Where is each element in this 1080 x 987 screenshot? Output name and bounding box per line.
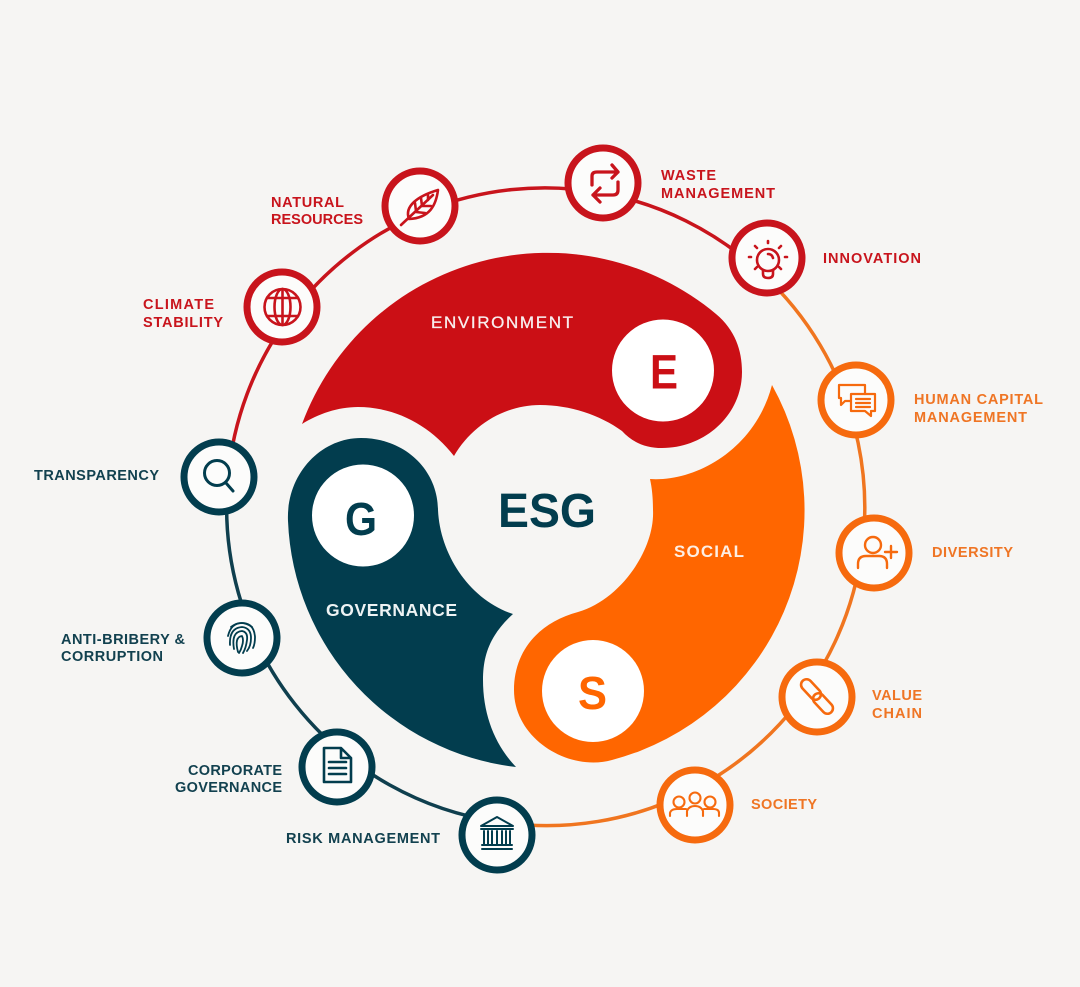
badge: G	[312, 464, 414, 566]
badge: G: G	[345, 493, 377, 545]
label: society: SOCIETY	[751, 797, 817, 813]
label: value chain: CHAIN	[872, 706, 922, 722]
node: society	[660, 770, 730, 840]
title: ESG: ESG	[498, 485, 596, 538]
label: waste management	[661, 168, 775, 202]
label: anti-bribery and corruption: ANTI-BRIBERY &	[61, 632, 186, 648]
node: value chain	[782, 662, 852, 732]
ring: environment arc	[228, 188, 757, 478]
panel: social segment	[514, 385, 805, 763]
label: climate stability: CLIMATE	[143, 297, 214, 313]
node: diversity	[839, 518, 909, 588]
environment heading: ENVIRONMENT	[431, 313, 573, 332]
label: natural resources: RESOURCES	[271, 212, 363, 228]
node: natural resources	[385, 171, 455, 241]
badge: S: S	[578, 667, 607, 719]
node: corporate governance	[302, 732, 372, 802]
label: corporate governance: GOVERNANCE	[175, 780, 282, 796]
label: diversity: DIVERSITY	[932, 545, 1013, 561]
governance heading: GOVERNANCE	[326, 600, 457, 620]
badge: E: E	[650, 346, 678, 400]
panel: environment segment	[302, 253, 742, 456]
node: risk management	[462, 800, 532, 870]
label: natural resources: NATURAL	[271, 195, 344, 211]
label: human capital management: MANAGEMENT	[914, 410, 1027, 426]
label: value chain: VALUE	[872, 688, 922, 704]
node: human capital management	[821, 365, 891, 435]
node: transparency	[184, 442, 254, 512]
label: value chain	[872, 688, 922, 722]
label: human capital management	[914, 392, 1043, 426]
node: innovation	[732, 223, 802, 293]
panel: governance segment	[288, 438, 516, 767]
label: climate stability	[143, 297, 223, 331]
label: corporate governance: CORPORATE	[188, 763, 282, 779]
badge: E	[612, 320, 714, 422]
label: innovation: INNOVATION	[823, 251, 921, 267]
label: risk management: RISK MANAGEMENT	[286, 831, 440, 847]
label: natural resources	[271, 195, 363, 228]
ring: social arc	[499, 269, 865, 826]
node: anti-bribery and corruption	[207, 603, 277, 673]
label: transparency: TRANSPARENCY	[34, 468, 159, 484]
label: human capital management: HUMAN CAPITAL	[914, 392, 1043, 408]
label: anti-bribery and corruption	[61, 632, 186, 665]
label: climate stability: STABILITY	[143, 315, 223, 331]
node: climate stability	[247, 272, 317, 342]
badge: S	[542, 640, 644, 742]
node: waste management	[568, 148, 638, 218]
label: anti-bribery and corruption: CORRUPTION	[61, 649, 163, 665]
label: waste management: WASTE	[661, 168, 716, 184]
social heading: SOCIAL	[674, 542, 744, 561]
label: corporate governance	[175, 763, 282, 796]
label: waste management: MANAGEMENT	[661, 186, 775, 202]
ring: governance arc	[227, 478, 499, 822]
